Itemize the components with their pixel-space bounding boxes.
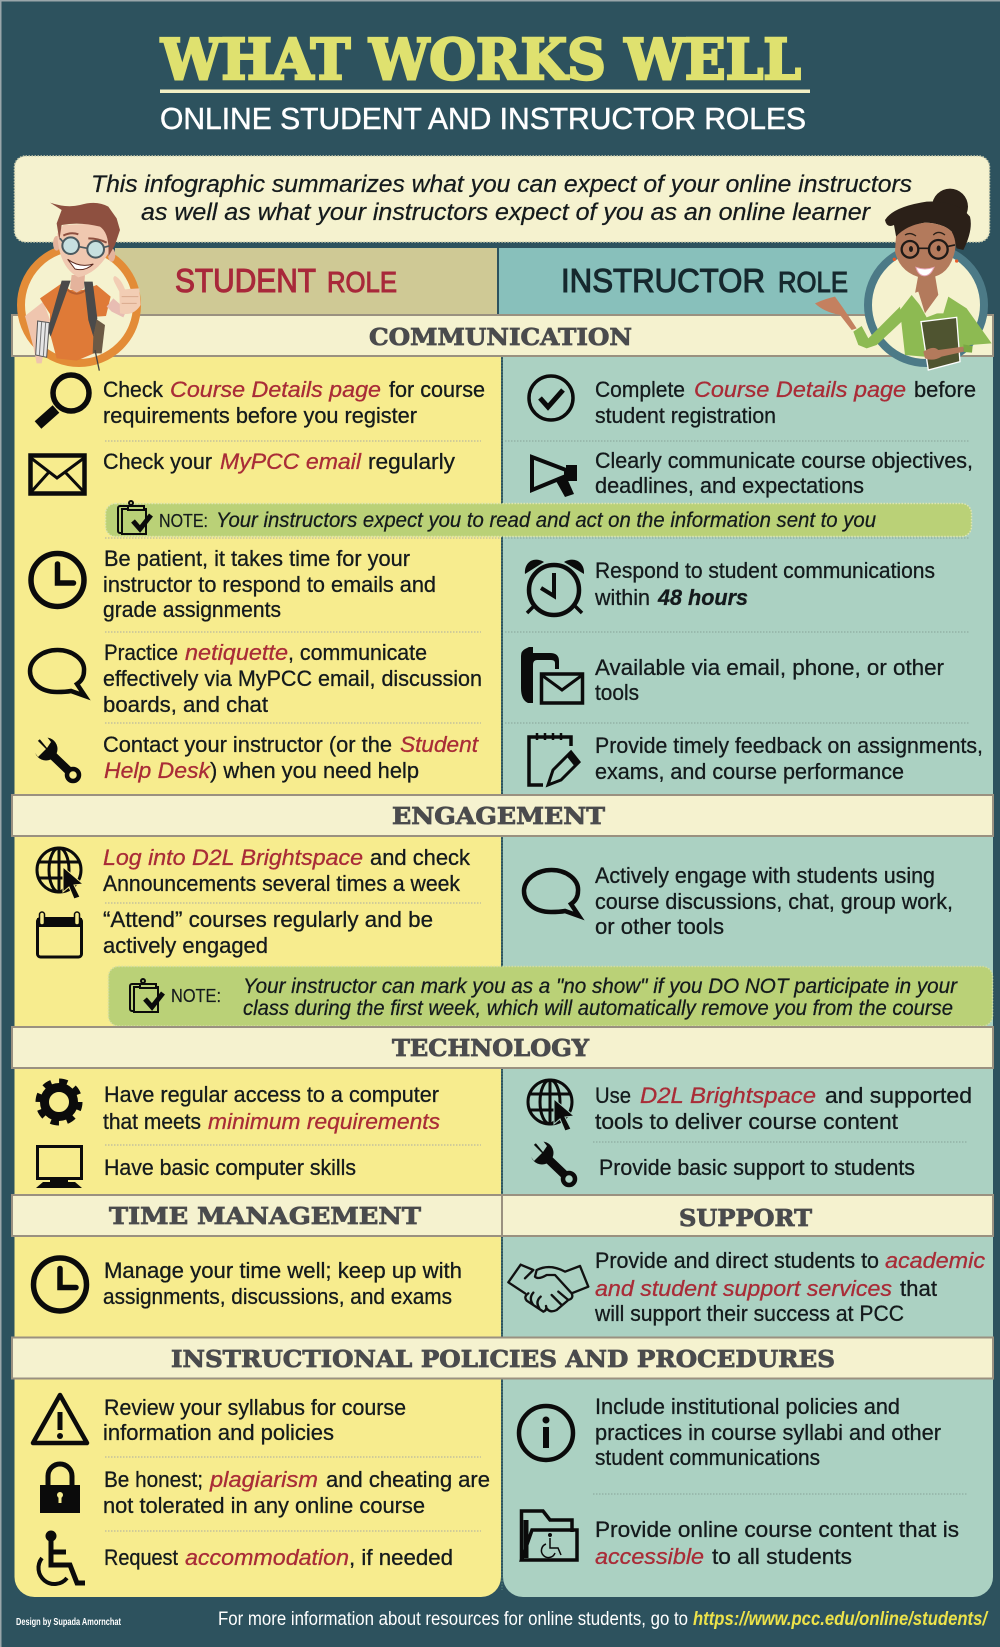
student: attend [37,907,433,958]
text: check course details [103,377,485,428]
icon: phone and mail [521,647,582,703]
text: accessible content: to all students [712,1544,852,1569]
text: honesty: not tolerated in any online course [103,1493,425,1518]
text: note: Your instructor can mark you as a "no show" if you DO NOT participate in your [243,975,958,998]
note: read and act [106,501,972,536]
text: log in: Announcements several times a week [103,871,461,896]
text: engage: course discussions, chat, group work, [595,889,953,914]
icon: globe with cursor [528,1080,574,1131]
icon: clock [34,1258,86,1311]
text: institutional policies: Include institutional policies and [595,1394,900,1419]
text: check course details: Check [103,377,164,402]
text: computer skills: Have basic computer skills [104,1155,356,1180]
text: objectives: deadlines, and expectations [595,473,864,498]
section bar: instructional policies and procedures [12,1338,993,1378]
text: institutional policies: practices in course syllabi and other [595,1420,941,1445]
illustration: student character [21,203,141,371]
text: complete: student registration [595,403,776,428]
section bar: time management and support [12,1195,993,1236]
text: D2L tools: Use [595,1083,631,1108]
intro panel: This infographic summarizes what you can expect of your online instructors [91,171,912,198]
text: attend [103,907,433,958]
text: check course details: Course Details page [170,377,381,402]
student: honesty [40,1464,490,1518]
text: institutional policies [595,1394,941,1470]
footer: credit: Design by Supada Amornchat [16,1617,121,1628]
text: support services: academic [885,1248,985,1273]
icon: notepad and pencil [529,733,579,785]
text: basic support: Provide basic support to students [599,1155,915,1180]
text: syllabus: Review your syllabus for course [104,1395,406,1420]
text: contact: ) when you need help [210,758,419,783]
text: netiquette: Practice [104,640,178,665]
text: available: Available via email, phone, or other [595,655,945,680]
text: be patient: instructor to respond to emails and [103,572,436,597]
icon: globe with cursor [37,848,83,899]
instructor: support services [508,1248,985,1326]
section bar: instructional policies and procedures: INSTRUCTIONAL POLICIES AND PROCEDURES [171,1346,835,1373]
text: accommodation: accommodation [185,1545,349,1570]
text: accommodation: , if needed [349,1545,453,1570]
header: student role: STUDENT [175,262,316,299]
text: manage time: assignments, discussions, and exams [103,1284,452,1309]
text: contact [103,732,480,783]
icon: alarm clock [525,560,584,615]
student: log into D2L [37,845,471,899]
panel: student column background [14,356,501,1597]
text: D2L tools: and supported [825,1083,972,1108]
text: check email: MyPCC email [220,449,362,474]
text: accessible content: Provide online course content that is [595,1517,959,1542]
section bar: technology: TECHNOLOGY [392,1035,590,1062]
text: objectives [595,448,973,498]
text: check email: regularly [368,449,456,474]
text: note: class during the first week, which will automatically remove you from the course [243,997,953,1020]
text: D2L tools: D2L Brightspace [640,1083,816,1108]
text: netiquette: , communicate [288,640,427,665]
text: note [171,975,958,1020]
text: accommodation: Request [104,1545,179,1570]
text: be patient [103,546,436,622]
icon: wheelchair [38,1532,85,1584]
text: computer access [103,1082,440,1134]
text: attend: actively engaged [103,933,268,958]
instructor: objectives [532,448,973,498]
text: log in [103,845,471,896]
text: feedback [595,733,983,784]
text: complete [595,377,976,428]
section bar: communication [12,315,993,356]
text: complete: before [914,377,976,402]
text: support services: and student support services [595,1276,892,1301]
text: computer access: Have regular access to a computer [104,1082,439,1107]
icon: folder with wheelchair [522,1511,577,1560]
section bar: engagement: ENGAGEMENT [392,803,605,830]
instructor: available [521,647,945,705]
text: support services: will support their success at PCC [594,1301,904,1326]
note: no show [108,966,992,1026]
instructor: accessible content [522,1511,959,1569]
text: engage [595,863,953,939]
icon: calendar [37,912,82,957]
text: computer access: that meets [103,1109,201,1134]
section bar: time management and support: SUPPORT [679,1205,812,1232]
section bar: engagement [12,795,993,836]
text: honesty [103,1467,490,1518]
icon: wrench [526,1137,575,1185]
instructor: feedback [529,733,983,785]
header: instructor role: INSTRUCTOR [561,262,765,299]
text: contact: Help Desk [104,758,212,783]
text: log in: Log into D2L Brightspace [103,845,363,870]
header: instructor role: ROLE [778,267,848,299]
text: available: tools [595,680,639,705]
icon: clipboard [118,501,151,534]
icon: envelope [30,456,84,494]
instructor: institutional policies [519,1394,941,1470]
text: respond: within [594,585,650,610]
text: honesty: plagiarism [209,1467,318,1492]
text: netiquette: netiquette [185,640,288,665]
section bar: communication: COMMUNICATION [369,324,632,351]
text: institutional policies: student communications [595,1445,820,1470]
text: engage: Actively engage with students using [595,863,935,888]
text: respond [594,558,935,610]
section bar: time management and support: TIME MANAGEMENT [109,1203,421,1230]
icon: handshake [508,1265,588,1312]
student: computer access [39,1082,440,1134]
icon: speech bubble [30,650,85,696]
text: support services [594,1248,985,1326]
footer: more information [218,1609,989,1630]
text: accessible content [595,1517,959,1569]
text: objectives: Clearly communicate course objectives, [595,448,973,473]
student: contact [30,732,480,783]
icon: clock [31,554,84,606]
instructor: basic support [526,1137,915,1185]
instructor: D2L tools [528,1080,972,1134]
icon: padlock [40,1464,80,1513]
text: check course details: for course [389,377,485,402]
icon: info circle [519,1406,573,1460]
text: manage time: Manage your time well; keep up with [104,1258,462,1283]
text: attend: “Attend” courses regularly and be [103,907,433,932]
text: check course details: requirements before you register [103,403,417,428]
text: log in: and check [370,845,471,870]
student: email [30,449,456,494]
student: syllabus [33,1395,406,1445]
text: feedback: exams, and course performance [595,759,904,784]
icon: megaphone [532,457,577,497]
text: check email [103,449,456,474]
section bar: technology [12,1027,993,1068]
header: student role: ROLE [327,267,397,299]
text: manage time [103,1258,462,1309]
title: WHAT WORKS WELL [160,27,801,93]
text: accessible content: accessible [595,1544,704,1569]
student: course details [38,375,485,428]
text: accommodation [104,1545,453,1570]
text: contact: Contact your instructor (or the [103,732,392,757]
icon: check circle [529,376,573,420]
text: be patient: grade assignments [103,597,281,622]
header: instructor role [499,248,899,315]
text: check email: Check your [103,449,212,474]
text: note: Your instructors expect you to read and act on the information sent to you [216,509,876,532]
student: manage time [34,1258,462,1311]
text: note: NOTE: [159,511,208,531]
instructor: respond [525,558,935,615]
icon: gear [39,1082,79,1122]
footer: more information: For more information about resources for online students, go to [218,1609,688,1630]
icon: speech bubble [524,870,579,916]
student: netiquette [30,640,482,717]
text: syllabus: information and policies [103,1420,334,1445]
panel: instructor column background [503,356,993,1597]
icon: clipboard [130,979,163,1012]
intro panel [14,156,990,242]
text: support services: that [900,1276,938,1301]
illustration: instructor character [815,189,992,370]
student: computer skills [36,1146,356,1188]
header: student role [115,248,497,315]
text: netiquette: boards, and chat [103,692,269,717]
text: honesty: Be honest; [104,1467,203,1492]
icon: wrench [30,733,79,781]
text: feedback: Provide timely feedback on assignments, [595,733,983,758]
text: contact: Student [400,732,480,757]
text: support services: Provide and direct students to [595,1248,879,1273]
instructor: engage [524,863,953,939]
text: syllabus [103,1395,406,1445]
text: computer access: minimum requirements [208,1109,440,1134]
text: D2L tools: tools to deliver course content [595,1109,899,1134]
text: complete: Complete [595,377,685,402]
icon: warning triangle [33,1395,87,1443]
student: be patient [31,546,436,622]
text: respond: Respond to student communications [595,558,935,583]
text: engage: or other tools [595,914,724,939]
text: netiquette [103,640,482,717]
icon: computer [36,1146,82,1188]
text: available [595,655,945,705]
text: honesty: and cheating are [326,1467,490,1492]
text: respond: 48 hours [657,585,748,610]
text: netiquette: effectively via MyPCC email, discussion [103,666,482,691]
text: D2L tools [595,1083,972,1134]
subtitle: ONLINE STUDENT AND INSTRUCTOR ROLES [160,101,806,136]
text: complete: Course Details page [694,377,906,402]
icon: magnifier [38,375,89,425]
text: be patient: Be patient, it takes time for your [104,546,410,571]
student: accommodation [38,1532,453,1584]
intro panel: as well as what your instructors expect of you as an online learner [141,199,871,226]
text: note: NOTE: [171,986,221,1006]
instructor: course details [529,376,976,428]
